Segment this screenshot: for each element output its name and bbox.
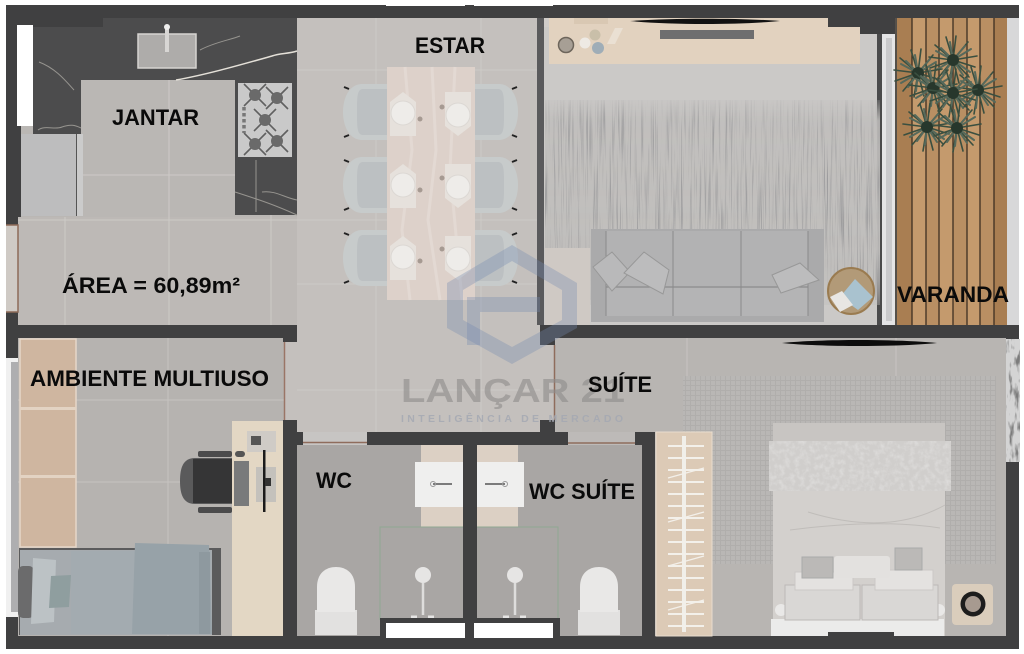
watermark text: INTELIGÊNCIA DE MERCADO — [401, 412, 623, 425]
watermark text — [401, 372, 625, 425]
panel: varanda deck — [895, 18, 1019, 325]
nightstand with lamp — [952, 584, 993, 625]
panel: ambiente multiuso — [6, 325, 297, 636]
window: kitchen — [17, 25, 33, 126]
single bed — [18, 543, 221, 635]
tv console — [549, 18, 860, 64]
double bed — [769, 423, 951, 636]
watermark logo — [447, 245, 577, 364]
panel: jantar and estar floor — [6, 18, 555, 432]
icon: cooktop — [238, 83, 292, 157]
panel: wc suíte — [477, 445, 642, 636]
label: estar: ESTAR — [415, 33, 485, 58]
basket with cushions — [828, 268, 874, 314]
icon: plants — [894, 36, 1002, 152]
desk — [232, 421, 283, 636]
watermark text: LANÇAR 21 — [401, 372, 625, 409]
sink — [138, 24, 196, 68]
label: jantar: JANTAR — [112, 105, 199, 130]
panel: suíte — [540, 325, 1006, 636]
refrigerator — [21, 134, 83, 216]
office chair — [180, 451, 232, 513]
sliding door: living to varanda — [882, 34, 895, 325]
label: varanda: VARANDA — [897, 282, 1009, 307]
label: wc suite: WC SUÍTE — [529, 479, 635, 504]
dining table — [387, 67, 475, 300]
sofa — [591, 229, 824, 322]
kitchen counter — [33, 18, 297, 215]
panel: wc — [297, 432, 463, 636]
wardrobe — [20, 339, 76, 547]
label: area: ÁREA = 60,89m² — [62, 273, 240, 298]
label: wc: WC — [316, 468, 352, 493]
shoe rack — [656, 432, 712, 636]
room labels — [30, 33, 1009, 504]
label: ambiente multiuso: AMBIENTE MULTIUSO — [30, 366, 269, 391]
bathroom walls and windows — [367, 432, 568, 649]
window: suíte — [1006, 339, 1020, 462]
bedroom rug — [683, 376, 996, 564]
dining chairs — [343, 84, 518, 286]
label: suite: SUÍTE — [588, 372, 652, 397]
panel: living room — [537, 18, 882, 325]
